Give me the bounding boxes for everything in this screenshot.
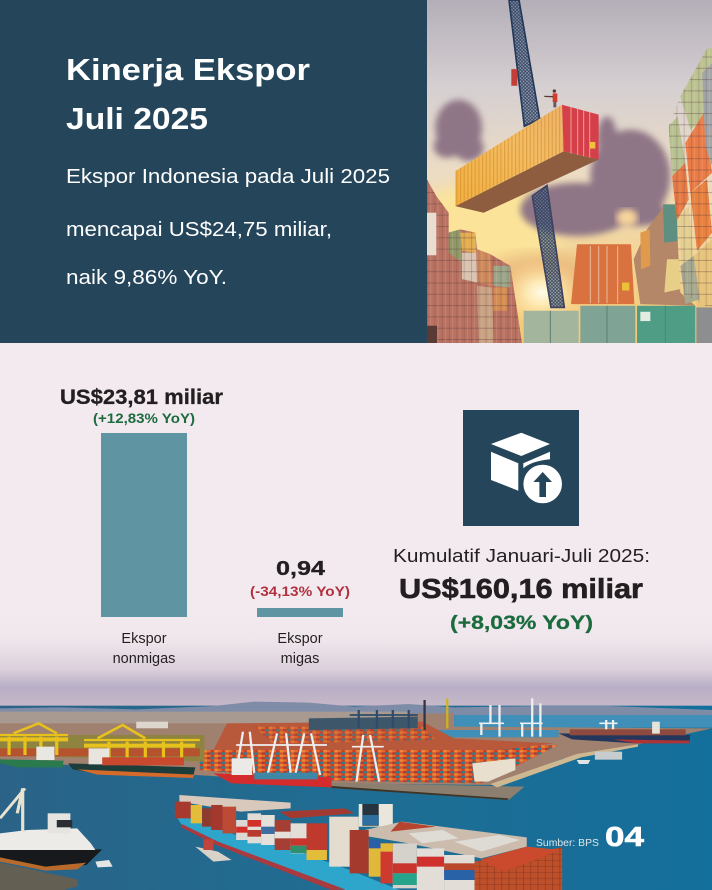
text block: export summary: naik 9,86% YoY.	[66, 267, 227, 289]
axis label: ekspor migas	[277, 631, 323, 667]
bar: ekspor nonmigas	[101, 433, 187, 617]
title: Juli 2025	[66, 101, 208, 136]
bar: ekspor migas	[257, 608, 343, 617]
bar value: migas: (-34,13% YoY)	[250, 584, 350, 599]
white cranes	[236, 698, 618, 782]
callout: cumulative exports: Kumulatif Januari-Juli 2025:	[393, 546, 650, 566]
land and yard	[0, 713, 712, 785]
bar value: migas: 0,94	[276, 558, 326, 580]
hanging container	[455, 105, 599, 213]
bar value: nonmigas: US$23,81 miliar	[60, 386, 223, 409]
crane mast	[509, 0, 564, 307]
moored ships	[0, 722, 690, 787]
bar chart: export composition	[60, 386, 350, 667]
title: Kinerja Ekspor	[66, 52, 310, 87]
yellow cranes	[0, 723, 200, 760]
container stacks centre	[524, 244, 695, 343]
text block: export summary: mencapai US$24,75 miliar,	[66, 219, 332, 241]
panel: header	[0, 0, 427, 343]
callout: cumulative exports: US$160,16 miliar	[399, 573, 643, 604]
large container ship	[169, 795, 562, 890]
axis label: ekspor migas: migas	[281, 651, 319, 667]
hull	[169, 804, 400, 890]
bar value: nonmigas: (+12,83% YoY)	[93, 411, 195, 426]
forward containers	[175, 795, 354, 860]
axis label: ekspor nonmigas	[113, 631, 175, 667]
bar value: migas	[250, 558, 350, 599]
photo: container being lifted by crane	[427, 0, 712, 343]
bar value: nonmigas	[60, 386, 223, 426]
callout: cumulative exports: (+8,03% YoY)	[450, 613, 593, 634]
text block: export summary: Ekspor Indonesia pada Juli 2025	[66, 166, 390, 188]
container stacks left	[427, 179, 522, 343]
container stacks right	[634, 48, 712, 343]
mountains	[0, 702, 712, 715]
sky fade above port photo	[0, 612, 712, 706]
title	[66, 52, 310, 136]
axis label: ekspor nonmigas: Ekspor	[121, 631, 167, 647]
text block: export summary	[66, 166, 390, 289]
distant cranes	[350, 698, 447, 730]
photo: container port and ship	[0, 698, 712, 890]
docks	[331, 744, 638, 800]
icon: box with up arrow	[463, 410, 579, 526]
axis label: ekspor migas: Ekspor	[277, 631, 323, 647]
far water	[454, 715, 712, 728]
page number: 04	[605, 821, 645, 852]
callout: cumulative exports	[393, 546, 650, 634]
left ship	[0, 788, 113, 871]
quay bottom left	[0, 863, 78, 890]
tugboat	[195, 839, 232, 862]
worker	[544, 89, 557, 107]
source note: Sumber: BPS	[536, 838, 599, 849]
axis label: ekspor nonmigas: nonmigas	[113, 651, 175, 667]
superstructure	[329, 804, 393, 867]
aft containers	[350, 822, 562, 890]
